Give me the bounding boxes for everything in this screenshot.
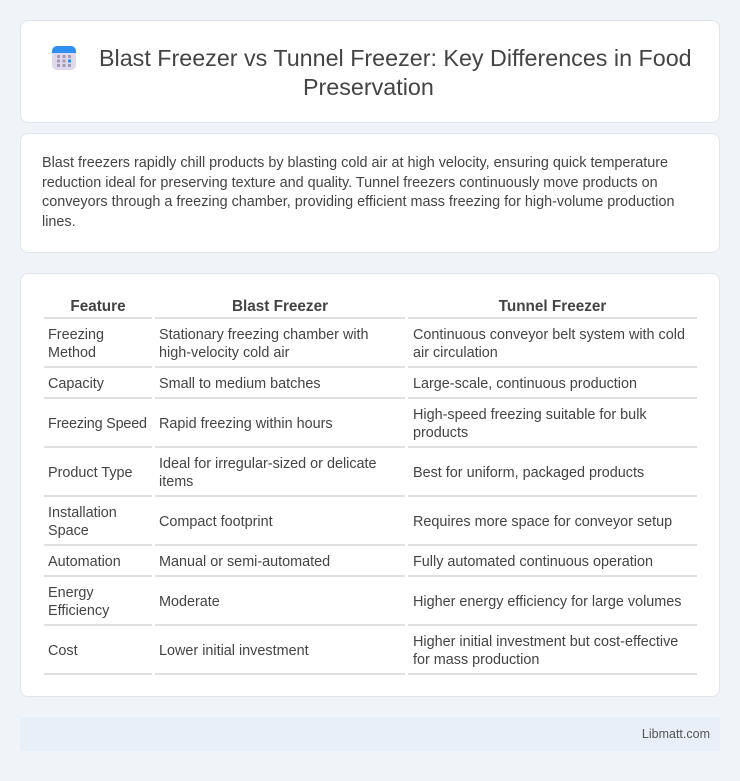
cell: tunnel capacity: Large-scale, continuous production bbox=[413, 376, 637, 392]
row label: Energy Efficiency: Energy bbox=[48, 585, 94, 601]
footer credit: Libmatt.com bbox=[642, 727, 710, 741]
cell: tunnel cost: for mass production bbox=[413, 652, 539, 668]
text block: introduction bbox=[42, 155, 674, 230]
cell: blast freezing method bbox=[159, 327, 369, 361]
cell: blast speed: Rapid freezing within hours bbox=[159, 416, 333, 432]
cell: blast freezing method: Stationary freezing chamber with bbox=[159, 327, 369, 343]
row label: Energy Efficiency bbox=[48, 585, 110, 619]
cell: tunnel speed bbox=[413, 407, 647, 441]
cell: blast freezing method: high-velocity cold air bbox=[159, 345, 289, 361]
cell: blast product type: Ideal for irregular-sized or delicate bbox=[159, 456, 377, 472]
cell: tunnel cost: Higher initial investment but cost-effective bbox=[413, 634, 678, 650]
row label: Installation Space: Space bbox=[48, 523, 89, 539]
cell: tunnel space: Requires more space for conveyor setup bbox=[413, 514, 672, 530]
heading: Preservation bbox=[303, 74, 434, 100]
row label: Cost: Cost bbox=[48, 643, 78, 659]
row label: Freezing Method: Method bbox=[48, 345, 96, 361]
row label: Automation: Automation bbox=[48, 554, 121, 570]
cell: blast cost: Lower initial investment bbox=[159, 643, 309, 659]
footer bbox=[20, 717, 720, 751]
text block: introduction: Blast freezers rapidly chill products by blasting cold air at high velocity, ensuring quick temperature bbox=[42, 155, 668, 171]
cell: tunnel product type: Best for uniform, packaged products bbox=[413, 465, 644, 481]
cell: tunnel cost bbox=[413, 634, 678, 668]
cell: blast space: Compact footprint bbox=[159, 514, 273, 530]
row label: Energy Efficiency: Efficiency bbox=[48, 603, 109, 619]
cell: blast capacity: Small to medium batches bbox=[159, 376, 321, 392]
panel: introduction bbox=[20, 133, 720, 253]
cell: tunnel automation: Fully automated continuous operation bbox=[413, 554, 653, 570]
heading: Blast Freezer vs Tunnel Freezer: Key Differences in Food bbox=[99, 45, 692, 71]
row label: Freezing Method: Freezing bbox=[48, 327, 104, 343]
cell: tunnel freezing method bbox=[413, 327, 685, 361]
cell: tunnel speed: High-speed freezing suitable for bulk bbox=[413, 407, 647, 423]
panel: title bbox=[20, 20, 720, 123]
cell: tunnel speed: products bbox=[413, 425, 468, 441]
row label: Installation Space: Installation bbox=[48, 505, 117, 521]
text block: introduction: reduction ideal for preserving texture and quality. Tunnel freezers continuously move products on bbox=[42, 174, 658, 190]
cell: tunnel energy: Higher energy efficiency for large volumes bbox=[413, 594, 682, 610]
table header: Blast Freezer: Blast Freezer bbox=[232, 298, 328, 315]
panel: comparison table bbox=[20, 273, 720, 697]
text block: introduction: conveyors through a freezing chamber, providing efficient mass freezing for high-volume production bbox=[42, 194, 674, 210]
row label: Installation Space bbox=[48, 505, 117, 539]
cell: blast product type bbox=[159, 456, 377, 490]
cell: blast energy: Moderate bbox=[159, 594, 220, 610]
cell: tunnel freezing method: air circulation bbox=[413, 345, 498, 361]
table header: Tunnel Freezer: Tunnel Freezer bbox=[499, 298, 606, 315]
cell: blast automation: Manual or semi-automated bbox=[159, 554, 330, 570]
heading bbox=[99, 45, 692, 100]
cell: blast product type: items bbox=[159, 474, 193, 490]
row label: Freezing Speed: Freezing Speed bbox=[48, 416, 147, 432]
row label: Capacity: Capacity bbox=[48, 376, 104, 392]
text block: introduction: lines. bbox=[42, 214, 76, 230]
table header: Feature: Feature bbox=[70, 298, 126, 315]
row label: Freezing Method bbox=[48, 327, 104, 361]
row label: Product Type: Product Type bbox=[48, 465, 133, 481]
cell: tunnel freezing method: Continuous conveyor belt system with cold bbox=[413, 327, 685, 343]
icon: calendar grid bbox=[52, 46, 76, 70]
